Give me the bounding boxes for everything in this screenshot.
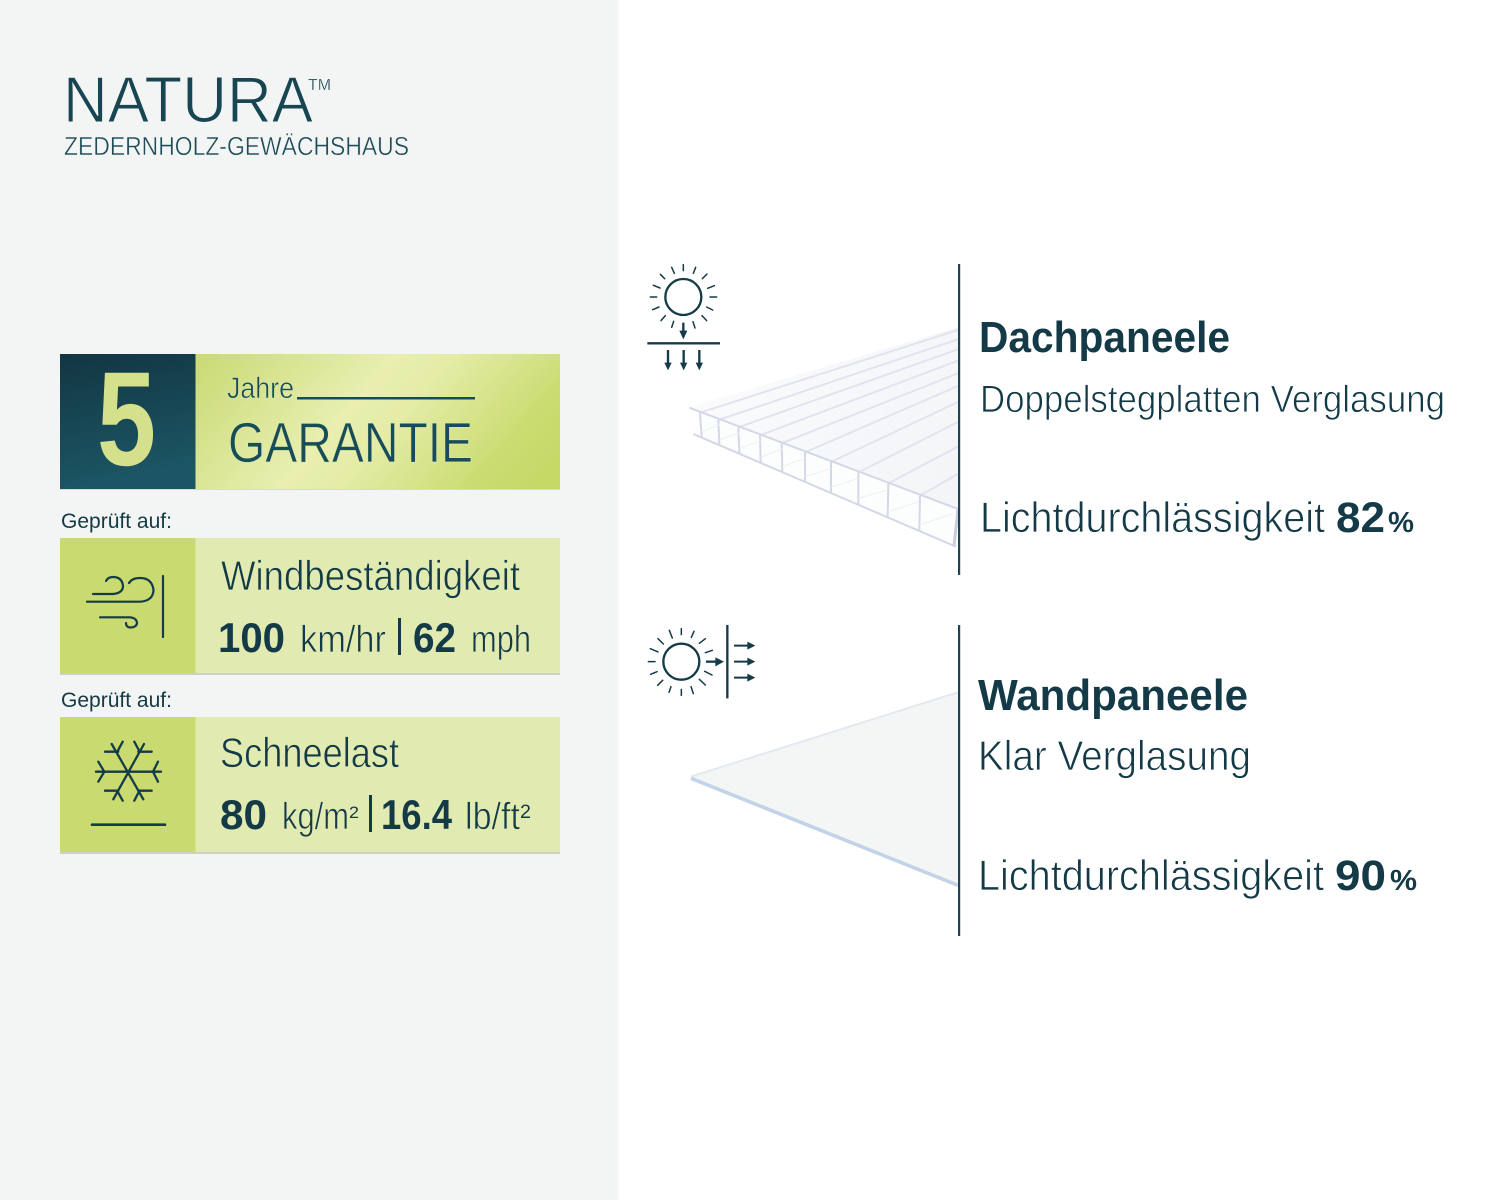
- wind imperial value: 62: [413, 614, 456, 661]
- warranty number: 5: [97, 345, 156, 494]
- snow metric value: 80: [220, 791, 267, 838]
- snow metric unit: kg/m: [282, 796, 349, 838]
- panel: left background: [0, 0, 618, 1200]
- roof percent sign: %: [1388, 507, 1414, 539]
- roof light transmission label: Lichtdurchlässigkeit: [980, 494, 1325, 542]
- illustration: twin-wall roof panel: [688, 327, 958, 547]
- panel: wind resistance: [60, 538, 560, 675]
- label: tested for snow: Geprüft auf:: [61, 688, 172, 712]
- icon: sun above roof panel: [647, 265, 720, 370]
- snow separator: [369, 795, 372, 832]
- snow heading: Schneelast: [220, 729, 399, 776]
- label: tested for wind: Geprüft auf:: [61, 509, 172, 533]
- wind separator: [398, 618, 401, 655]
- roof heading: Dachpaneele: [979, 314, 1230, 362]
- wall percent sign: %: [1390, 865, 1417, 897]
- wind metric unit: km/hr: [300, 619, 386, 661]
- icon: sun beside wall panel: [648, 625, 755, 698]
- panel: snow load: [60, 717, 560, 854]
- warranty text background: [196, 354, 560, 489]
- title: NATURA: NATURA: [63, 63, 314, 136]
- text block: wall panels: [978, 672, 1417, 900]
- divider: wall panel: [958, 625, 960, 936]
- snow imperial value: 16.4: [381, 791, 453, 838]
- warranty heading: GARANTIE: [228, 411, 473, 475]
- wall glazing type: Klar Verglasung: [978, 732, 1251, 779]
- warranty number block: [60, 354, 196, 489]
- roof glazing type: Doppelstegplatten Verglasung: [980, 379, 1445, 421]
- snow metric exponent: 2: [349, 803, 359, 822]
- wall light transmission label: Lichtdurchlässigkeit: [978, 852, 1324, 900]
- trademark: TM: [308, 77, 331, 94]
- wall heading: Wandpaneele: [978, 672, 1248, 720]
- warranty years label: Jahre: [227, 372, 294, 405]
- subtitle: ZEDERNHOLZ-GEWÄCHSHAUS: [64, 133, 409, 161]
- text block: roof panels: [979, 314, 1445, 542]
- panel: warranty badge: [60, 345, 560, 494]
- divider: roof panel: [958, 264, 960, 575]
- wind heading: Windbeständigkeit: [221, 552, 520, 599]
- wind imperial unit: mph: [471, 619, 531, 661]
- warranty rule: [297, 397, 475, 400]
- wall light transmission value: 90: [1335, 852, 1386, 900]
- icon: snowflake: [92, 742, 165, 825]
- wind metric value: 100: [218, 614, 285, 661]
- snow imperial exponent: 2: [520, 802, 531, 823]
- title block: [63, 63, 409, 161]
- roof light transmission value: 82: [1336, 494, 1385, 542]
- icon: wind: [87, 576, 163, 637]
- illustration: clear wall panel: [691, 692, 958, 885]
- snow imperial unit: lb/ft: [465, 796, 520, 838]
